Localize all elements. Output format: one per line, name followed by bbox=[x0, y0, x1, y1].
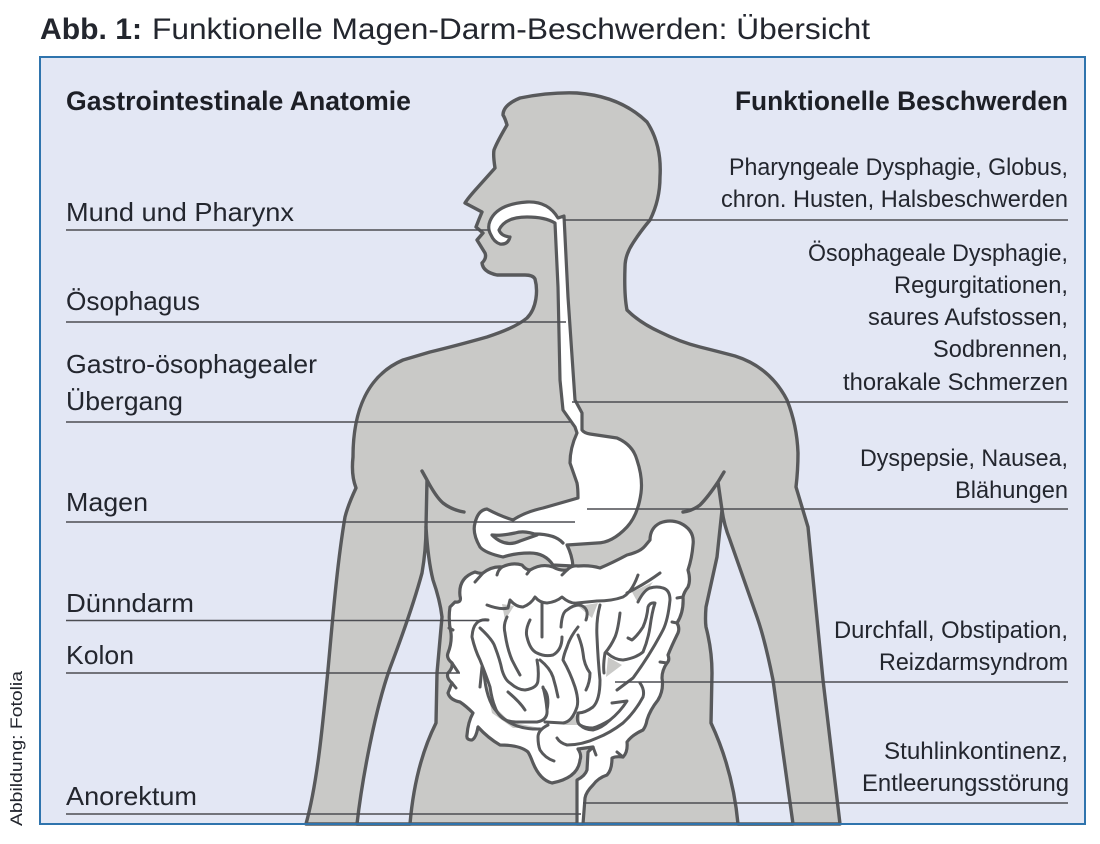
intestine loop lines bbox=[449, 567, 683, 761]
colon and small intestine bbox=[448, 521, 693, 824]
label: oesophagus: Ösophagus bbox=[66, 286, 200, 316]
complaints: bowel: Reizdarmsyndrom bbox=[879, 649, 1068, 676]
complaints: anorectum bbox=[862, 738, 1069, 797]
gaps between intestine loops bbox=[483, 582, 653, 728]
label: small intestine: Dünndarm bbox=[66, 588, 194, 618]
photo credit: Abbildung: Fotolia bbox=[7, 670, 26, 826]
complaints: pharynx bbox=[721, 154, 1068, 213]
body silhouette bbox=[306, 93, 840, 824]
column heading: anatomy: Gastrointestinale Anatomie bbox=[66, 86, 411, 116]
leader lines bbox=[66, 220, 1068, 814]
complaints: oesophagus: Sodbrennen, bbox=[933, 336, 1068, 363]
complaints: oesophagus: saures Aufstossen, bbox=[868, 304, 1068, 331]
complaints: pharynx: chron. Husten, Halsbeschwerden bbox=[721, 186, 1068, 213]
label: mouth and pharynx: Mund und Pharynx bbox=[66, 197, 294, 227]
anatomy labels bbox=[66, 197, 317, 811]
complaint labels bbox=[721, 154, 1069, 797]
complaints: bowel: Durchfall, Obstipation, bbox=[834, 617, 1068, 644]
label: anorectum: Anorektum bbox=[66, 781, 197, 811]
label: gastro-oesophageal junction: Übergang bbox=[66, 386, 183, 416]
complaints: oesophagus: Regurgitationen, bbox=[894, 272, 1068, 299]
complaints: oesophagus: thorakale Schmerzen bbox=[843, 369, 1068, 396]
complaints: stomach: Dyspepsie, Nausea, bbox=[860, 445, 1068, 472]
complaints: stomach: Blähungen bbox=[955, 477, 1068, 504]
complaints: anorectum: Entleerungsstörung bbox=[862, 770, 1069, 797]
complaints: pharynx: Pharyngeale Dysphagie, Globus, bbox=[729, 154, 1068, 181]
title: Funktionelle Magen-Darm-Beschwerden: Übersicht bbox=[152, 13, 871, 46]
complaints: stomach bbox=[860, 445, 1068, 504]
complaints: oesophagus: Ösophageale Dysphagie, bbox=[808, 240, 1068, 267]
column heading: complaints: Funktionelle Beschwerden bbox=[735, 86, 1068, 116]
anatomical figure bbox=[306, 93, 840, 824]
label: gastro-oesophageal junction bbox=[66, 349, 317, 416]
label: stomach: Magen bbox=[66, 487, 148, 517]
label: colon: Kolon bbox=[66, 640, 134, 670]
mouth, oesophagus and stomach bbox=[474, 202, 642, 566]
title: Abb. 1: bbox=[40, 13, 142, 46]
label: gastro-oesophageal junction: Gastro-ösophagealer bbox=[66, 349, 317, 379]
complaints: anorectum: Stuhlinkontinenz, bbox=[884, 738, 1068, 765]
complaints: bowel bbox=[834, 617, 1068, 676]
complaints: oesophagus bbox=[808, 240, 1068, 396]
